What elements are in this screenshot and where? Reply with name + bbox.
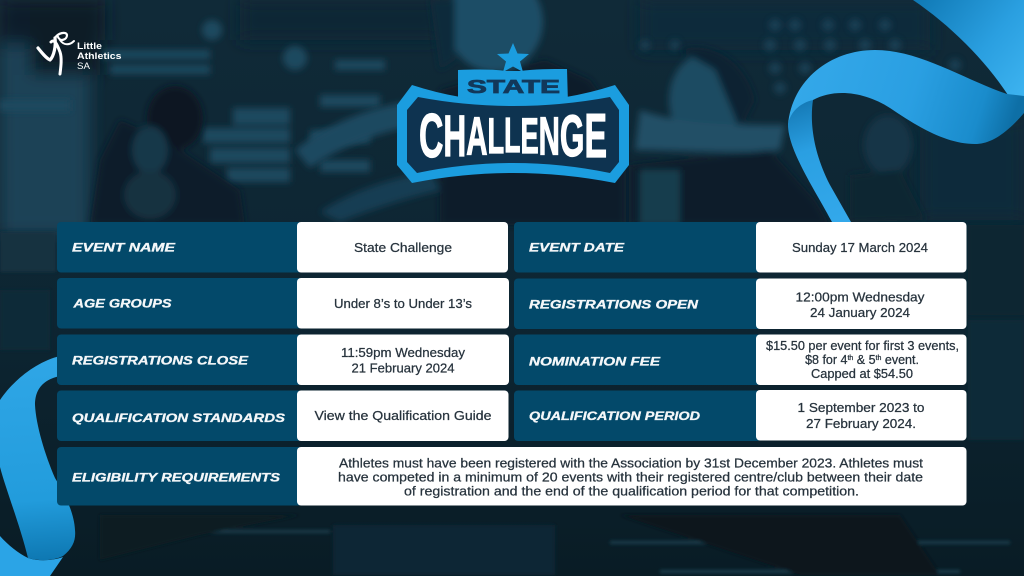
badge word: CHALLENGE: L [487,108,504,164]
row: event date [514,222,966,272]
badge word: CHALLENGE: L [504,109,520,163]
row: registrations close: 11:59pm Wednesday [341,345,466,360]
logo: Little Athletics SA [38,33,124,74]
badge word: STATE: STATE [467,77,560,97]
badge inner plate [407,97,619,173]
row: event name [57,222,508,272]
row: registrations close [57,334,509,385]
row: event date: Sunday 17 March 2024 [792,240,928,255]
table: event information [57,222,966,506]
icon: star [497,43,529,72]
State Challenge badge [397,43,629,183]
row: eligibility requirements: of registration and the end of the qualification period for that competition. [404,484,859,498]
badge word: CHALLENGE: A [466,106,487,166]
logo wordmark: Little [77,41,102,52]
badge word: CHALLENGE: G [560,104,584,169]
logo wordmark: Athletics [77,51,122,62]
row: qualification period: 27 February 2024. [806,416,916,431]
logo wordmark: SA [77,61,91,72]
row: registrations open: REGISTRATIONS OPEN [529,300,699,312]
row: eligibility requirements: Athletes must have been registered with the Association by 31st December 2023. Athletes must [339,456,923,470]
row: registrations close: 21 February 2024 [352,360,454,376]
row: event name: EVENT NAME [72,242,175,254]
row: nomination fee: $15.50 per event for first 3 events, [766,339,959,353]
row: eligibility requirements: have competed in a minimum of 20 events with their registered centre/club between their date [338,470,923,484]
row: nomination fee: $8 for 4 [805,353,847,367]
row: registrations open [514,278,966,329]
background dots: stadium crowd [640,19,961,94]
background figures [90,0,925,225]
row: nomination fee: NOMINATION FEE [529,356,660,368]
badge outer shield [397,85,629,183]
row: age groups [57,278,509,328]
row: qualification period: 1 September 2023 to [798,400,924,415]
ribbon: bottom left [0,356,75,576]
row: event date: EVENT DATE [529,242,624,254]
row: nomination fee: th [847,355,853,362]
row: qualification standards [57,390,508,441]
row: nomination fee: event. [881,353,919,367]
row: qualification standards: QUALIFICATION STANDARDS [72,413,285,425]
badge tab [458,69,568,104]
badge word: CHALLENGE: H [443,104,466,169]
icon: running figure [38,33,74,74]
row: nomination fee: & 5 [853,353,876,367]
ribbon: top right [788,0,1024,222]
row: age groups: Under 8’s to Under 13’s [334,296,472,311]
badge word: CHALLENGE: C [419,102,443,171]
row: registrations open: 24 January 2024 [810,305,910,320]
row: qualification period: QUALIFICATION PERIOD [529,411,700,423]
row: nomination fee [514,334,966,385]
badge word: CHALLENGE: E [520,108,539,164]
row: qualification standards: View the Qualification Guide [314,408,492,423]
row: qualification period [514,390,966,441]
row: event name: State Challenge [354,240,452,255]
row: registrations close: REGISTRATIONS CLOSE [72,356,248,368]
badge word: CHALLENGE: E [584,102,607,171]
row: nomination fee: th [876,355,881,362]
row: eligibility requirements: ELIGIBILITY REQUIREMENTS [72,472,280,484]
row: age groups: AGE GROUPS [72,298,172,310]
row: nomination fee: Capped at $54.50 [811,367,913,381]
badge word: CHALLENGE: N [539,106,560,166]
row: eligibility requirements [57,447,966,506]
row: registrations open: 12:00pm Wednesday [796,290,925,304]
